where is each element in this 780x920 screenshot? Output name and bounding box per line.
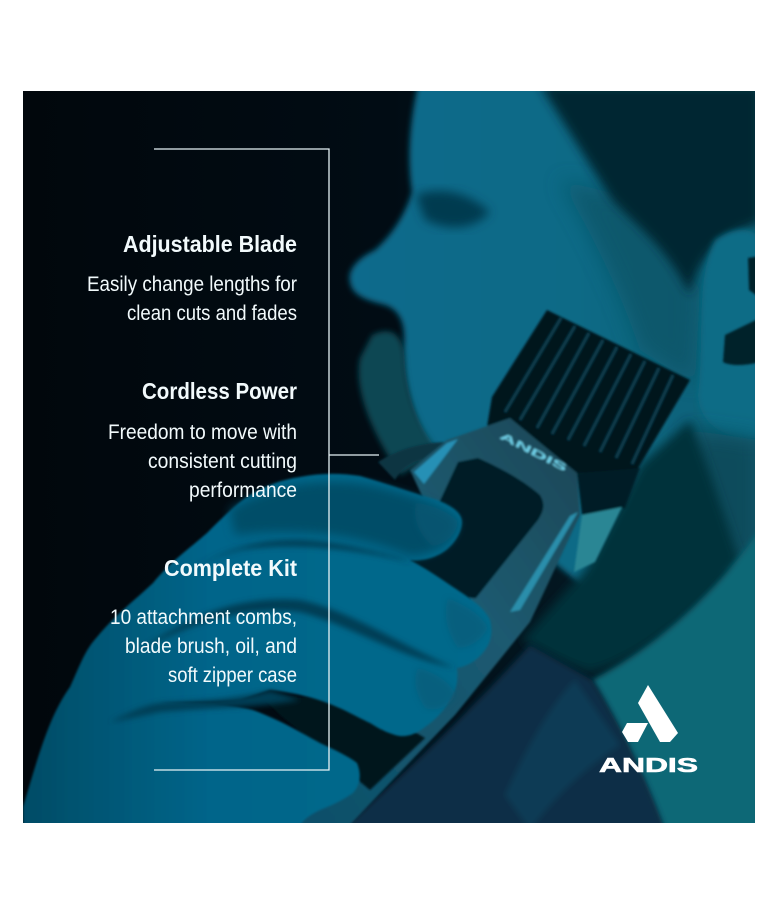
comb lock slider xyxy=(577,468,640,515)
description: 10 attachment combs, xyxy=(110,606,297,629)
shirt collar xyxy=(340,645,665,830)
finger crease 2 xyxy=(140,599,455,668)
description xyxy=(110,606,297,687)
description: consistent cutting xyxy=(148,450,297,473)
comb teeth xyxy=(505,318,673,464)
heading: Complete Kit xyxy=(164,555,297,581)
comb guard xyxy=(574,507,622,572)
temple shading xyxy=(566,182,698,376)
clipper handle xyxy=(290,418,580,830)
comb attachment xyxy=(487,310,690,473)
thumbnail index xyxy=(421,510,422,511)
face and skin xyxy=(350,85,760,600)
feature text column xyxy=(87,231,297,687)
icon: logo mark xyxy=(622,685,678,742)
printed clipper brand: ANDIS xyxy=(498,431,569,475)
description: soft zipper case xyxy=(168,664,297,687)
man's head xyxy=(350,85,760,830)
finger crease 1 xyxy=(216,538,402,562)
clipper xyxy=(290,310,690,830)
feature: complete kit xyxy=(110,555,297,687)
description: clean cuts and fades xyxy=(127,302,297,325)
description: blade brush, oil, and xyxy=(125,635,297,658)
hair xyxy=(540,85,760,295)
clipper strap xyxy=(378,442,450,480)
panel: photo of man trimming beard xyxy=(23,85,760,830)
neck xyxy=(592,530,760,830)
thumbnail middle xyxy=(446,601,486,647)
description xyxy=(108,421,297,502)
lower beard xyxy=(522,420,740,672)
bracket frame xyxy=(154,149,379,770)
metal edge highlight xyxy=(510,512,578,612)
grip pad xyxy=(410,458,543,598)
logo wordmark: ANDIS xyxy=(599,755,698,777)
ear xyxy=(698,230,760,438)
description: performance xyxy=(189,479,297,502)
heading: Cordless Power xyxy=(142,378,297,404)
logo: Andis xyxy=(599,685,698,777)
feature: cordless power xyxy=(108,378,297,502)
index finger shade xyxy=(230,482,458,556)
description xyxy=(87,273,297,325)
ear upper shadow xyxy=(746,255,755,296)
jaw stubble shading xyxy=(697,425,755,556)
metal highlight xyxy=(414,439,458,484)
frame outline xyxy=(154,149,329,770)
hand xyxy=(23,474,491,830)
photo background xyxy=(23,91,755,823)
ear inner shadow xyxy=(723,318,760,365)
moustache and chin beard xyxy=(359,331,440,475)
connector to clipper xyxy=(329,454,379,456)
collar fold xyxy=(507,684,616,823)
description: Easily change lengths for xyxy=(87,273,297,296)
description: Freedom to move with xyxy=(108,421,297,444)
eye socket shadow xyxy=(416,191,490,227)
dark gap between fingers xyxy=(260,695,425,790)
heading: Adjustable Blade xyxy=(123,231,297,257)
hand and fingers silhouette xyxy=(23,474,491,830)
thumbnail ring xyxy=(416,670,452,708)
feature: adjustable blade xyxy=(87,231,297,325)
finger crease 3 xyxy=(110,690,300,722)
